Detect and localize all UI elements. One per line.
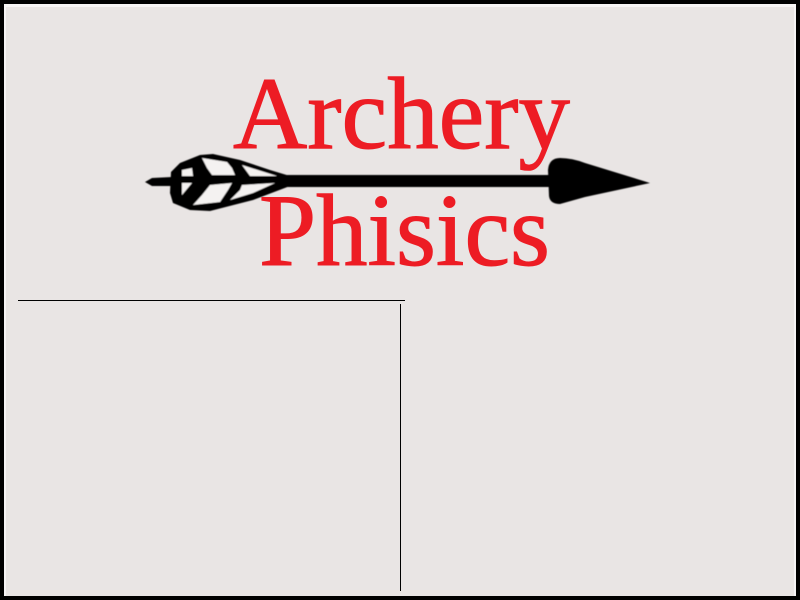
horizontal axis line bbox=[18, 300, 405, 301]
arrowhead bbox=[548, 158, 650, 204]
arrow fletching bbox=[170, 154, 290, 211]
icon: arrow bbox=[145, 154, 650, 211]
vertical axis line bbox=[400, 304, 401, 591]
title: Archery: Archery bbox=[233, 57, 570, 171]
fletching vanes bbox=[182, 158, 277, 205]
title: Phisics: Phisics bbox=[259, 174, 550, 288]
arrow shaft bbox=[145, 175, 550, 187]
